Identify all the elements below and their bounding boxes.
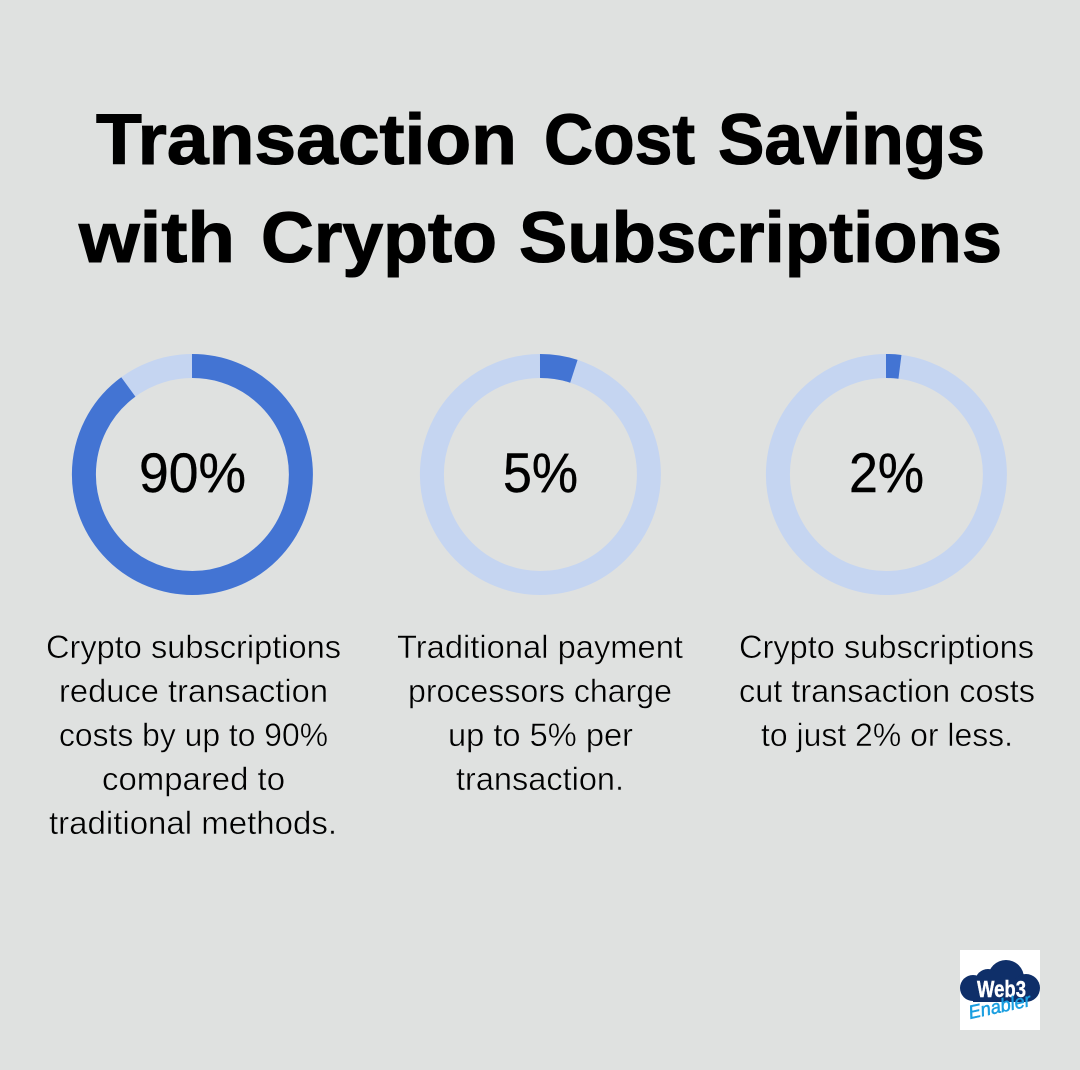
- description: 90%: Crypto subscriptions: [46, 629, 341, 665]
- value: 2%: 2%: [849, 441, 924, 504]
- logo wordmark: Enabler: Enabler: [967, 990, 1033, 1024]
- title: Savings: [718, 101, 985, 180]
- title: Subscriptions: [519, 199, 1002, 278]
- description: 2%: [739, 629, 1035, 753]
- description: 5%: up to 5% per: [448, 717, 633, 753]
- panel: 5% traditional processors: [397, 366, 683, 797]
- logo wordmark: Web3: Web3: [977, 976, 1026, 1002]
- description: 5%: transaction.: [456, 761, 624, 797]
- title: Cost: [544, 101, 695, 180]
- description: 2%: to just 2% or less.: [761, 717, 1013, 753]
- title: with: [78, 199, 235, 278]
- panel: 2% crypto subscriptions: [739, 366, 1035, 753]
- description: 2%: cut transaction costs: [739, 673, 1035, 709]
- description: 5%: [397, 629, 683, 797]
- value: 5%: 5%: [503, 441, 578, 504]
- donut chart: 90%: [84, 366, 301, 583]
- donut chart: 5%: [432, 366, 649, 583]
- value: 90%: 90%: [139, 441, 246, 504]
- description: 2%: Crypto subscriptions: [739, 629, 1034, 665]
- description: 90%: [46, 629, 341, 841]
- description: 5%: Traditional payment: [397, 629, 683, 665]
- title: Crypto: [261, 199, 497, 278]
- donut chart: 2%: [778, 366, 995, 583]
- title: [78, 101, 1002, 278]
- title: Transaction: [96, 101, 517, 180]
- description: 90%: compared to: [102, 761, 285, 797]
- logo: Web3 Enabler: [960, 950, 1040, 1030]
- icon: cloud: [960, 960, 1040, 1002]
- panel: 90% transaction cost reduction: [46, 366, 341, 841]
- description: 90%: traditional methods.: [49, 805, 337, 841]
- description: 90%: costs by up to 90%: [59, 717, 328, 753]
- description: 5%: processors charge: [408, 673, 672, 709]
- description: 90%: reduce transaction: [59, 673, 328, 709]
